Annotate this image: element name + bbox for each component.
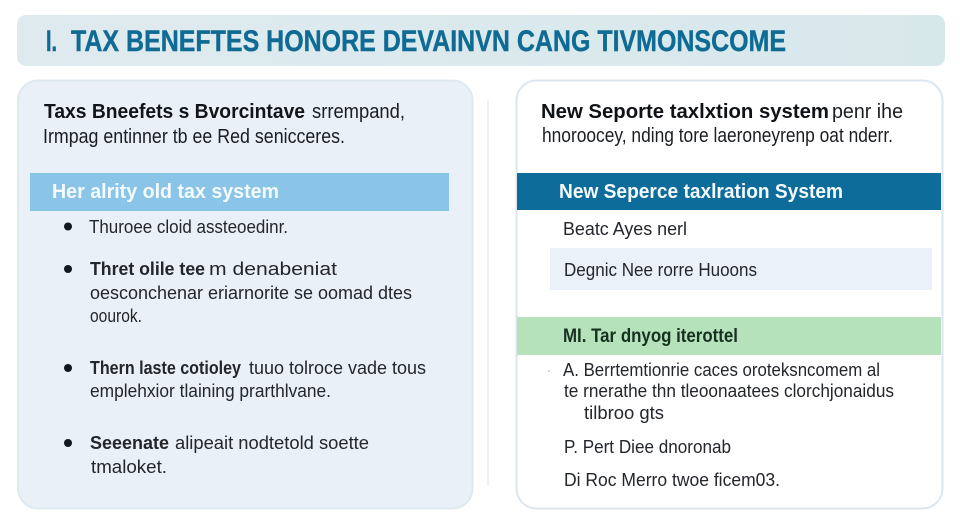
bullet 2: oesconchenar eriarnorite se oomad dtes: [90, 283, 412, 303]
lettered list: P. Pert Diee dnoronab: [564, 437, 731, 457]
bullet 1: Thuroee cloid assteoedinr.: [89, 217, 288, 237]
section band: new taxation system: New Seperce taxlration System: [559, 181, 843, 203]
panel: old tax system: [18, 80, 472, 508]
bullet 2: [64, 259, 412, 326]
bullet 3: tuuo tolroce vade tous: [249, 358, 426, 378]
bullet 2: m denabeniat: [209, 259, 337, 279]
section band: new taxation system: [517, 173, 941, 210]
bullet 2: oourok.: [90, 306, 142, 326]
intro text: old system: srrempand,: [312, 101, 405, 123]
lettered list: Di Roc Merro twoe ficem03.: [564, 470, 780, 490]
lettered list: tilbroo gts: [584, 403, 664, 423]
intro text: new system: penr ihe: [832, 101, 903, 123]
panel: new taxation system: [516, 80, 942, 508]
intro text: new system: New Seporte taxlxtion system: [541, 101, 829, 123]
bullet 3: [64, 358, 426, 401]
title: I.: [46, 25, 57, 58]
list line: Beatc Ayes nerl: [563, 219, 687, 239]
section band: old tax system: Her alrity old tax system: [52, 181, 279, 203]
bullet 4: alipeait nodtetold soette: [175, 433, 369, 453]
intro text: new system: hnoroocey, nding tore laeroneyrenp oat nderr.: [542, 125, 893, 147]
section band: old tax system: [30, 173, 449, 211]
lettered list: A. Berrtemtionrie caces oroteksncomem al: [563, 360, 880, 380]
lettered list: te rnerathe thn tleoonaatees clorchjonaidus: [564, 381, 894, 401]
intro text: new system: [541, 101, 903, 147]
section band: green: [517, 317, 941, 355]
title banner: [17, 15, 945, 66]
intro text: old system: Irmpag entinner tb ee Red senicceres.: [43, 126, 345, 148]
bullet 2: Thret olile tee: [90, 259, 205, 279]
section band: green: MI. Tar dnyog iterottel: [563, 326, 738, 347]
highlighted row: [550, 248, 932, 290]
bullet 3: Thern laste cotioley: [90, 358, 241, 378]
lettered list: [548, 360, 894, 490]
bullet 3: emplehxior tlaining prarthlvane.: [90, 381, 331, 401]
highlighted row: Degnic Nee rorre Huoons: [564, 260, 757, 280]
bullet 4: Seeenate: [90, 433, 169, 453]
intro text: old system: [43, 101, 405, 148]
intro text: old system: Taxs Bneefets s Bvorcintave: [44, 101, 305, 123]
title: TAX BENEFTES HONORE DEVAINVN CANG TIVMONSCOME: [71, 25, 786, 58]
bullet 4: tmaloket.: [91, 457, 167, 477]
bullet 4: [64, 433, 369, 477]
